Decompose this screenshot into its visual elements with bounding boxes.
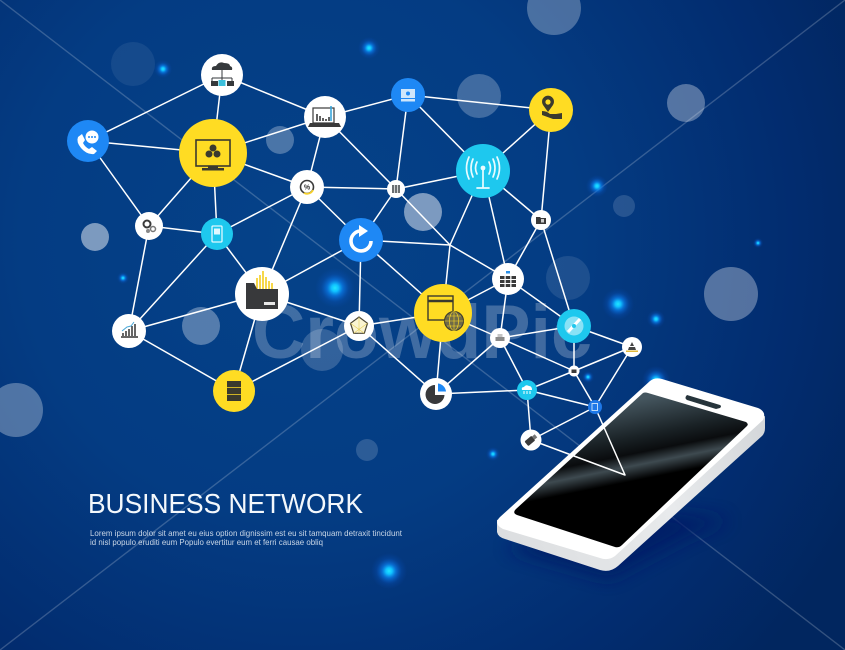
- node: small blue document: [588, 400, 602, 414]
- description text: Lorem ipsum dolor sit amet eu eius option dignissim est eu sit tamquam detraxit tincidunt: [90, 528, 403, 538]
- description text: [90, 528, 403, 547]
- node: wifi antenna: [456, 144, 510, 198]
- node: percent gauge: [290, 170, 324, 204]
- node: cloud hierarchy: [201, 54, 243, 96]
- node: small folder search: [531, 210, 551, 230]
- node: blue video screen: [391, 78, 425, 112]
- watermark: CrowdPic: [252, 290, 592, 375]
- node: location in hand: [529, 88, 573, 132]
- node: small columns: [387, 180, 405, 198]
- node: printer: [490, 328, 510, 348]
- node: pentagon radar: [344, 311, 374, 341]
- description text: id nisl populo eruditi eum Populo evertitur eum et ferri causae obliq: [90, 537, 323, 547]
- node: refresh: [339, 218, 383, 262]
- smartphone: [497, 378, 765, 578]
- node: disc: [557, 309, 591, 343]
- node: monitor: [179, 119, 247, 187]
- network connection lines: [88, 75, 632, 475]
- bokeh circles: [0, 0, 758, 461]
- node: pie chart: [420, 378, 452, 410]
- node: gears: [135, 212, 163, 240]
- node: cyan cloud: [517, 380, 537, 400]
- node: cabinet: [213, 370, 255, 412]
- glowing light points: [117, 37, 763, 589]
- node: bar chart: [112, 314, 146, 348]
- node: browser and globe: [414, 284, 472, 342]
- node: percent gauge: %: [304, 184, 311, 192]
- node: usb drive: [520, 430, 542, 450]
- node: pyramid: [622, 337, 642, 357]
- title: BUSINESS NETWORK: [88, 488, 363, 519]
- node: phone call: [67, 120, 109, 162]
- node: tablet: [201, 218, 233, 250]
- node: tiny briefcase: [568, 366, 580, 376]
- node: org table: [492, 263, 524, 295]
- node: laptop chart: [304, 96, 346, 138]
- node: folder with chart: [235, 267, 289, 321]
